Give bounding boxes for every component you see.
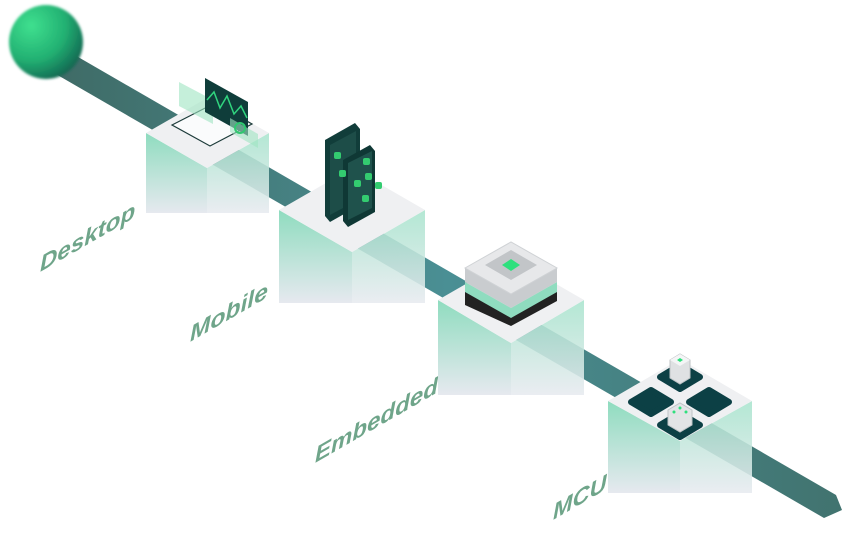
label: Mobile: Mobile xyxy=(190,277,268,347)
icon: chip xyxy=(465,242,557,326)
label: Embedded: Embedded xyxy=(315,372,439,468)
cube: mobile xyxy=(279,168,425,303)
ball xyxy=(9,5,83,79)
cube: embedded xyxy=(438,258,584,395)
icon: mcu blocks xyxy=(631,354,729,437)
icon: phones xyxy=(325,123,382,227)
label: Desktop: Desktop xyxy=(40,197,135,277)
icon: laptop xyxy=(172,78,258,148)
label: MCU: MCU xyxy=(553,468,608,525)
cube: mcu xyxy=(608,359,752,493)
cube: desktop xyxy=(146,98,269,213)
